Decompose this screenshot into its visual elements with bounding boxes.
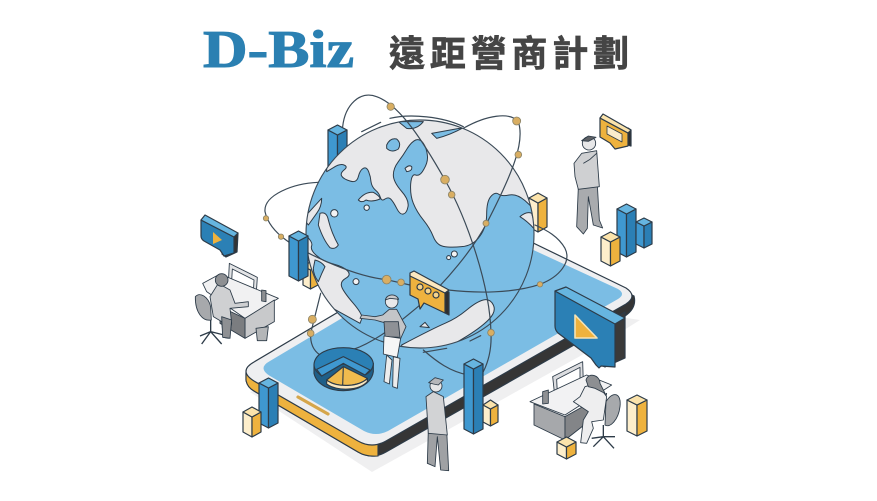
tower: gold right (601, 232, 620, 266)
play triangle (575, 315, 597, 338)
tower: gold behind globe (303, 262, 318, 289)
speech bubble: blue play small (201, 215, 238, 257)
speech bubble: gold mail (600, 114, 631, 149)
person at desk: right (530, 362, 620, 448)
man thinking (574, 136, 603, 234)
speech bubble: gold dots (410, 271, 449, 315)
northern land (327, 112, 540, 247)
seas (387, 122, 463, 151)
person at desk: left (195, 263, 278, 344)
tower: small gold near phone (483, 400, 498, 426)
phone screen (264, 230, 622, 434)
man foreground (426, 378, 449, 471)
woman presenter (360, 295, 406, 388)
tower: blue phone corner (259, 378, 278, 428)
tower: blue front (464, 359, 483, 434)
tower: gold phone corner (243, 407, 261, 437)
tower: blue short right (636, 218, 652, 248)
speech bubble: blue play large (555, 287, 625, 368)
tower: gold right of globe (529, 193, 547, 232)
tower: blue left of globe (289, 231, 308, 281)
tower: gold desk (557, 437, 576, 459)
globe (300, 112, 540, 352)
orbits and nodes (263, 95, 567, 375)
tower: gold far right (627, 395, 647, 436)
phone base (246, 222, 640, 472)
tower: blue behind globe (328, 125, 347, 172)
title: D-Biz: D-Biz (203, 21, 354, 79)
subtitle: remote business plan: 遠距營商計劃 (389, 33, 629, 74)
tower: blue tall right (617, 204, 636, 257)
phone home bar (298, 397, 328, 414)
pie chart (314, 348, 373, 391)
